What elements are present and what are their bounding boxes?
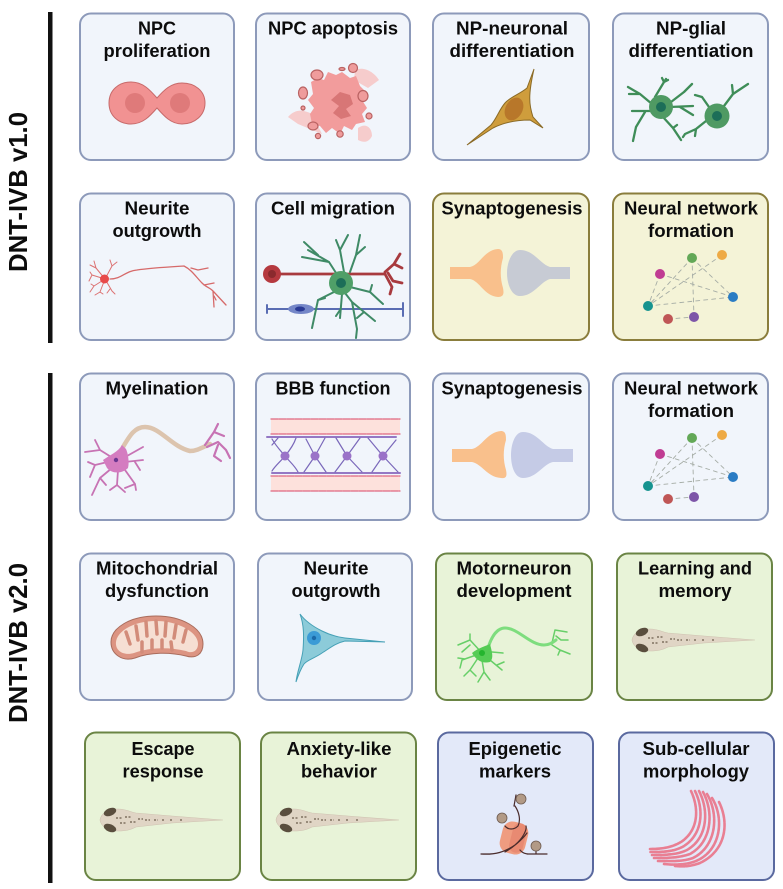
panel: NPC proliferation: NPC <box>138 18 176 38</box>
panel: Neural network formation (v1.0): formation <box>648 221 734 241</box>
icon: synapse <box>450 249 570 297</box>
icon: network graph <box>643 430 738 504</box>
panel: Cell migration: Cell migration <box>271 198 395 218</box>
panel: Neurite outgrowth (v1.0): outgrowth <box>112 221 202 241</box>
panel: Myelination: Myelination <box>106 378 208 398</box>
icon: zebrafish larva <box>632 626 755 654</box>
panel: Epigenetic markers: Epigenetic <box>468 739 562 759</box>
panel: Anxiety-like behavior <box>261 732 416 880</box>
panel: BBB function <box>256 374 410 520</box>
icon: network graph <box>643 250 738 324</box>
panel: Learning and memory: memory <box>658 581 732 601</box>
panel: Sub-cellular morphology <box>619 732 774 880</box>
panel: Epigenetic markers: markers <box>479 762 551 782</box>
panel: Synaptogenesis (v2.0) <box>433 374 589 520</box>
version label: DNT-IVB v2.0: DNT-IVB v2.0 <box>3 563 33 723</box>
panel: Neural network formation (v2.0): Neural network <box>624 378 759 398</box>
panel: Motorneuron development: development <box>456 581 572 601</box>
panel: NP-glial differentiation <box>613 14 768 160</box>
panel: NPC apoptosis <box>256 14 410 160</box>
panel: Synaptogenesis (v1.0): Synaptogenesis <box>442 198 582 218</box>
panel: Neurite outgrowth (v2.0) <box>258 554 412 700</box>
panel: Myelination <box>80 374 234 520</box>
panel: Motorneuron development <box>436 554 592 700</box>
panel: Mitochondrial dysfunction: dysfunction <box>105 581 209 601</box>
panel: NPC proliferation: proliferation <box>104 41 210 61</box>
panel: Escape response: response <box>122 762 204 782</box>
panel: Learning and memory: Learning and <box>638 558 752 578</box>
icon: motor neuron <box>458 628 570 682</box>
icon: zebrafish larva <box>100 806 223 834</box>
icon: synapse <box>452 431 573 478</box>
panel: Neural network formation (v2.0): formation <box>648 401 734 421</box>
version bar: DNT-IVB v2.0 <box>48 373 52 883</box>
panel: Neural network formation (v2.0) <box>613 374 768 520</box>
panel: Mitochondrial dysfunction <box>80 554 234 700</box>
panel: Sub-cellular morphology: Sub-cellular <box>642 739 750 759</box>
panel: Motorneuron development: Motorneuron <box>456 558 572 578</box>
panel: NPC proliferation <box>80 14 234 160</box>
icon: apoptotic cell <box>288 64 379 142</box>
icon: glial cells <box>628 78 748 141</box>
version bar: DNT-IVB v1.0 <box>48 12 52 343</box>
icon: migrating neurons and glia <box>263 235 403 338</box>
panel: Synaptogenesis (v1.0) <box>433 194 589 340</box>
panel: Escape response <box>85 732 240 880</box>
icon: mitochondrion <box>111 616 203 659</box>
panel: Learning and memory <box>617 554 772 700</box>
panel: Sub-cellular morphology: morphology <box>643 762 749 782</box>
version label: DNT-IVB v1.0: DNT-IVB v1.0 <box>3 112 33 272</box>
icon: blood-brain barrier <box>267 419 400 491</box>
panel: NP-neuronal differentiation: NP-neuronal <box>456 18 568 38</box>
panel: NP-glial differentiation: differentiation <box>628 41 754 61</box>
icon: nucleosome <box>481 794 547 857</box>
panel: Mitochondrial dysfunction: Mitochondrial <box>96 558 218 578</box>
panel: Neurite outgrowth (v1.0): Neurite <box>124 198 190 218</box>
panel: Synaptogenesis (v2.0): Synaptogenesis <box>442 378 582 398</box>
panel: Anxiety-like behavior: behavior <box>301 762 377 782</box>
panel: NP-glial differentiation: NP-glial <box>656 18 726 38</box>
icon: dividing cell <box>109 82 205 124</box>
icon: red neuron <box>89 260 226 307</box>
panel: NP-neuronal differentiation: differentiation <box>450 41 574 61</box>
panel: Neurite outgrowth (v1.0) <box>80 194 234 340</box>
panel: Neural network formation (v1.0) <box>613 194 768 340</box>
icon: neuronal cell <box>467 69 543 145</box>
panel: Neural network formation (v1.0): Neural network <box>624 198 759 218</box>
icon: zebrafish larva <box>276 806 399 834</box>
panel: Epigenetic markers <box>438 732 593 880</box>
panel: Cell migration <box>256 194 410 340</box>
icon: endoplasmic reticulum <box>650 791 725 866</box>
panel: BBB function: BBB function <box>276 378 390 398</box>
panel: NPC apoptosis: NPC apoptosis <box>268 18 398 38</box>
panel: Escape response: Escape <box>132 739 194 759</box>
icon: teal neuron <box>296 614 385 682</box>
panel: Anxiety-like behavior: Anxiety-like <box>286 739 392 759</box>
panel: Neurite outgrowth (v2.0): Neurite <box>304 558 368 578</box>
icon: myelinated neuron <box>85 424 230 495</box>
panel: Neurite outgrowth (v2.0): outgrowth <box>292 581 380 601</box>
panel: NP-neuronal differentiation <box>433 14 589 160</box>
